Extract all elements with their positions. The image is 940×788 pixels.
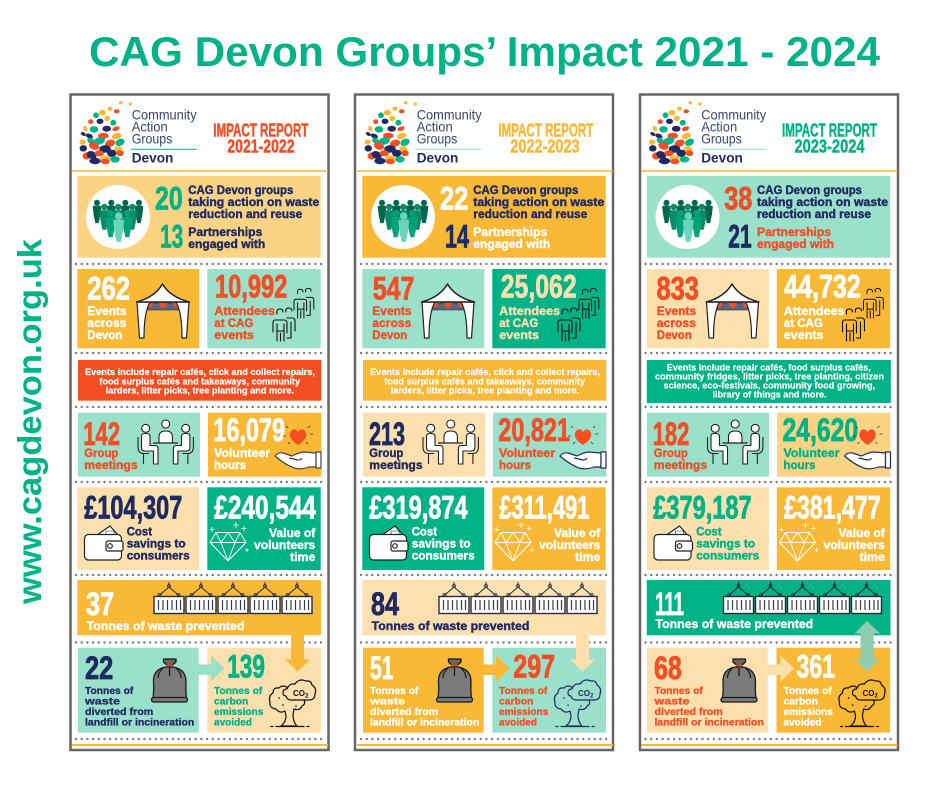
carbon avoided: 139 [227, 648, 265, 684]
attendees: Attendees [499, 304, 560, 318]
heading [782, 120, 877, 156]
events: Events [657, 304, 696, 318]
waste diverted: landfill or incineration [654, 716, 764, 728]
carbon avoided: 2 [305, 694, 309, 700]
waste diverted [78, 648, 199, 733]
cost savings [362, 487, 484, 570]
attendees: events [214, 328, 254, 342]
events [647, 269, 769, 348]
groups and partnerships: taking action on waste [188, 195, 320, 209]
heading [213, 120, 309, 156]
events: 262 [87, 270, 130, 306]
waste diverted: 22 [85, 650, 113, 686]
cost savings: savings to [412, 536, 471, 550]
event types: Events include repair cafés, click and collect repairs, [370, 367, 600, 378]
groups and partnerships: taking action on waste [473, 195, 605, 209]
value of volunteers time: volunteers [824, 538, 885, 552]
event types: library of things and more. [712, 390, 826, 400]
events [77, 269, 199, 348]
cost savings: Cost [412, 524, 437, 538]
volunteer hours: 20,821 [498, 412, 570, 448]
heading: 2022-2023 [510, 135, 580, 156]
attendees: events [499, 328, 539, 342]
waste prevented [77, 580, 321, 635]
waste prevented: Tonnes of waste prevented [656, 617, 813, 631]
waste diverted: Tonnes of [654, 685, 703, 697]
value of volunteers time: time [575, 550, 601, 564]
cost savings: Cost [696, 524, 722, 538]
volunteer hours: Volunteer [214, 446, 270, 460]
waste diverted: landfill or incineration [370, 716, 479, 728]
event types: science, eco-festivals, community food growing, [664, 380, 875, 392]
volunteer hours: 24,620 [782, 412, 858, 448]
event types [363, 360, 606, 401]
attendees: Attendees [784, 304, 845, 318]
carbon avoided: CO [293, 689, 305, 698]
attendees: at CAG [214, 316, 253, 330]
group meetings: 182 [653, 416, 689, 452]
waste diverted: diverted from [654, 706, 723, 718]
logo: Devon [132, 150, 173, 166]
logo: Groups [132, 130, 172, 146]
attendees: 10,992 [215, 268, 287, 304]
groups and partnerships: Partnerships [757, 225, 831, 239]
heading: IMPACT REPORT [782, 120, 877, 141]
groups and partnerships: 38 [724, 180, 752, 216]
volunteer hours [493, 412, 606, 477]
value of volunteers time [492, 487, 606, 570]
volunteer hours [777, 412, 890, 477]
arrow: prevented to carbon, double-headed [854, 621, 880, 672]
event types: food surplus cafés and takeaways, community [99, 376, 301, 388]
attendees: 44,732 [784, 268, 861, 304]
groups and partnerships [647, 176, 890, 258]
waste diverted [363, 648, 484, 733]
groups and partnerships: engaged with [473, 237, 550, 251]
event types: community fridges, litter picks, tree planting, citizen [655, 371, 884, 382]
arrow: diverted to carbon [483, 656, 510, 682]
carbon avoided [776, 648, 890, 733]
waste diverted: diverted from [85, 706, 153, 718]
value of volunteers time: time [290, 550, 316, 564]
volunteer hours: 16,079 [213, 412, 285, 448]
attendees: at CAG [784, 316, 823, 330]
value of volunteers time: time [860, 550, 885, 564]
waste prevented: 37 [86, 586, 114, 622]
value of volunteers time: £381,477 [784, 489, 881, 525]
events: across [372, 316, 412, 330]
waste diverted: diverted from [370, 706, 438, 718]
carbon avoided: Tonnes of [784, 685, 832, 697]
events: Devon [372, 328, 407, 342]
group meetings: 213 [369, 416, 405, 452]
group meetings: 142 [83, 416, 120, 452]
logo: Community [701, 106, 766, 122]
logo [649, 101, 766, 166]
event types: larders, litter picks, tree planting and more. [391, 386, 579, 397]
heading: 2021-2022 [227, 135, 295, 156]
waste prevented: Tonnes of waste prevented [87, 619, 244, 633]
carbon avoided: emissions [784, 706, 833, 718]
waste prevented: 111 [655, 586, 684, 622]
carbon avoided: avoided [784, 716, 822, 728]
cost savings: Cost [127, 524, 152, 538]
carbon avoided: carbon [784, 695, 818, 707]
carbon avoided: avoided [499, 716, 537, 728]
volunteer hours: hours [214, 458, 246, 472]
event types: food surplus cafés and takeaways, community [384, 376, 586, 388]
heading: IMPACT REPORT [213, 120, 309, 141]
event types [647, 360, 891, 403]
group meetings: Group [369, 446, 403, 460]
title: CAG Devon Groups’ Impact 2021 - 2024 [89, 28, 881, 75]
waste diverted: waste [653, 695, 690, 707]
group meetings: meetings [369, 458, 423, 472]
carbon avoided [207, 648, 321, 733]
logo [80, 101, 197, 166]
groups and partnerships [77, 176, 321, 258]
carbon avoided: Tonnes of [499, 685, 548, 697]
groups and partnerships: reduction and reuse [473, 207, 588, 221]
carbon avoided: emissions [214, 706, 263, 718]
carbon avoided: Tonnes of [214, 685, 263, 697]
logo: Action [701, 119, 737, 135]
cost savings [647, 487, 769, 570]
carbon avoided: CO [578, 689, 590, 698]
value of volunteers time: volunteers [254, 538, 316, 552]
group meetings: Group [654, 446, 688, 460]
cost savings: consumers [696, 548, 760, 562]
event types: Events include repair cafés, food surplus cafés, [667, 362, 871, 373]
waste prevented [362, 580, 606, 635]
value of volunteers time: Value of [838, 526, 886, 540]
waste diverted [647, 648, 768, 733]
group meetings: Group [84, 446, 118, 460]
carbon avoided: CO [862, 689, 874, 698]
events: 833 [656, 270, 699, 306]
groups and partnerships: 20 [155, 180, 183, 216]
value of volunteers time: £240,544 [214, 489, 316, 525]
carbon avoided: 2 [590, 694, 594, 700]
attendees: Attendees [214, 304, 275, 318]
groups and partnerships: taking action on waste [757, 195, 888, 209]
waste diverted: Tonnes of [85, 685, 134, 697]
value of volunteers time: volunteers [539, 538, 601, 552]
heading: IMPACT REPORT [498, 120, 594, 141]
panel: impact report 2023-2024 [640, 94, 898, 750]
panel: impact report 2022-2023 [355, 94, 613, 750]
waste diverted: 51 [370, 650, 393, 686]
groups and partnerships: 13 [160, 218, 183, 254]
events [362, 269, 484, 348]
group meetings [78, 413, 200, 477]
value of volunteers time: £311,491 [499, 489, 589, 525]
volunteer hours [208, 412, 321, 477]
value of volunteers time [207, 487, 321, 570]
arrow: prevented to carbon [285, 635, 310, 672]
logo: Devon [701, 150, 743, 166]
carbon avoided: emissions [499, 706, 548, 718]
logo: Action [417, 119, 453, 135]
logo: Action [132, 119, 168, 135]
value of volunteers time: Value of [554, 526, 601, 540]
group meetings: meetings [654, 458, 707, 472]
waste prevented: Tonnes of waste prevented [372, 619, 529, 633]
groups and partnerships: 14 [445, 218, 469, 254]
cost savings: consumers [127, 548, 190, 562]
groups and partnerships: 22 [440, 180, 468, 216]
logo [364, 101, 482, 166]
groups and partnerships: Partnerships [473, 225, 548, 239]
cost savings: consumers [412, 548, 475, 562]
events: across [87, 316, 127, 330]
events: Events [87, 304, 127, 318]
logo: Groups [417, 130, 457, 146]
group meetings [647, 413, 769, 477]
arrow: diverted to carbon [198, 656, 224, 682]
groups and partnerships: engaged with [188, 237, 265, 251]
groups and partnerships: 21 [728, 218, 752, 254]
attendees [207, 268, 321, 348]
groups and partnerships: Partnerships [188, 225, 263, 239]
waste diverted: waste [84, 695, 120, 707]
cost savings [77, 487, 199, 570]
waste diverted: waste [369, 695, 405, 707]
waste diverted: landfill or incineration [85, 716, 194, 728]
carbon avoided: carbon [214, 695, 248, 707]
cost savings: savings to [696, 536, 755, 550]
groups and partnerships: CAG Devon groups [473, 183, 579, 197]
logo: Groups [701, 130, 742, 146]
waste diverted: Tonnes of [370, 685, 419, 697]
group meetings: meetings [84, 458, 138, 472]
attendees [492, 268, 606, 348]
events: across [657, 316, 696, 330]
panel: impact report 2021-2022 [70, 94, 328, 750]
groups and partnerships: CAG Devon groups [757, 183, 862, 197]
events: Devon [657, 328, 692, 342]
carbon avoided: 297 [513, 648, 555, 684]
cost savings: £379,187 [653, 489, 752, 525]
heading: 2023-2024 [794, 135, 865, 156]
group meetings [363, 413, 485, 477]
volunteer hours: Volunteer [784, 446, 840, 460]
volunteer hours: Volunteer [499, 446, 555, 460]
volunteer hours: hours [499, 458, 531, 472]
events: 547 [373, 270, 414, 306]
attendees: events [784, 328, 824, 342]
carbon avoided: 2 [874, 694, 878, 700]
events: Events [372, 304, 412, 318]
logo: Community [132, 106, 197, 122]
website address: www.cagdevon.org.uk [11, 238, 48, 605]
cost savings: £104,307 [84, 489, 182, 525]
heading [498, 120, 594, 156]
value of volunteers time: Value of [269, 526, 316, 540]
volunteer hours: hours [784, 458, 816, 472]
event types: Events include repair cafés, click and collect repairs, [85, 367, 315, 378]
event types [78, 360, 321, 401]
carbon avoided: avoided [214, 716, 252, 728]
event types: larders, litter picks, tree planting and more. [106, 386, 294, 397]
logo: Devon [417, 150, 458, 166]
groups and partnerships [362, 176, 606, 258]
logo: Community [417, 106, 482, 122]
arrow: diverted to carbon [768, 656, 794, 682]
waste diverted: 68 [654, 650, 682, 686]
arrow: prevented to carbon [570, 635, 596, 672]
cost savings: savings to [127, 536, 186, 550]
carbon avoided [492, 648, 606, 733]
attendees: 25,062 [501, 268, 577, 304]
value of volunteers time [777, 487, 890, 570]
carbon avoided: 361 [796, 648, 835, 684]
waste prevented: 84 [371, 586, 399, 622]
carbon avoided: carbon [499, 695, 533, 707]
cost savings: £319,874 [369, 489, 468, 525]
attendees: at CAG [499, 316, 538, 330]
attendees [777, 268, 890, 348]
groups and partnerships: reduction and reuse [757, 207, 871, 221]
waste prevented [647, 580, 890, 635]
groups and partnerships: reduction and reuse [188, 207, 303, 221]
groups and partnerships: CAG Devon groups [188, 183, 294, 197]
groups and partnerships: engaged with [757, 237, 834, 251]
events: Devon [87, 328, 122, 342]
